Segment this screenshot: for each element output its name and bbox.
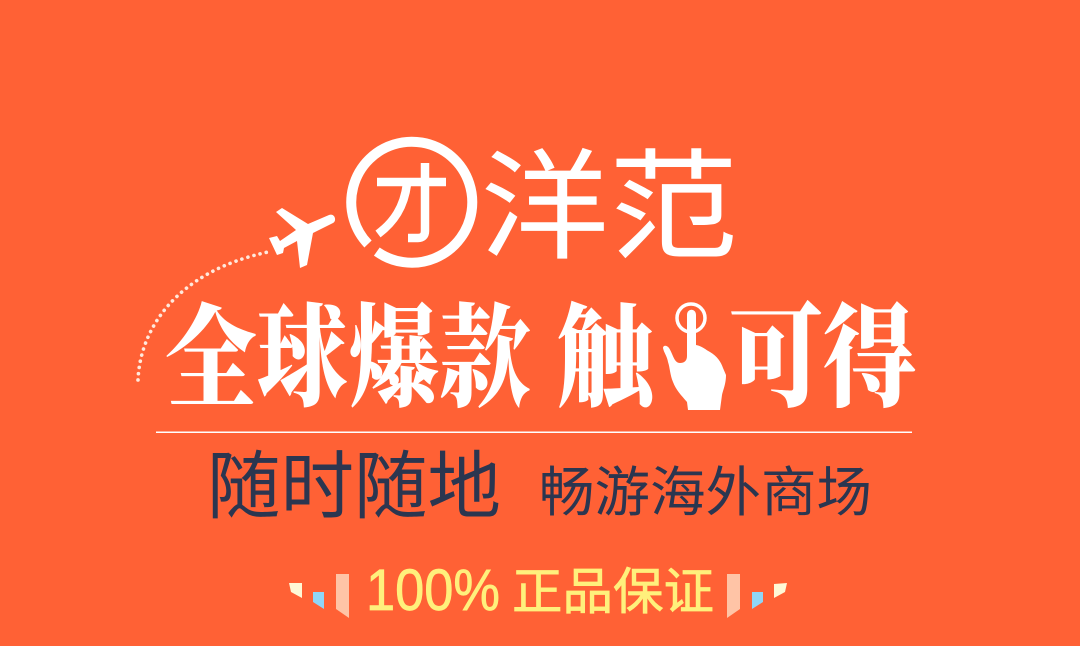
headline right: 可得	[729, 298, 917, 422]
guarantee text: 正品保证	[512, 564, 714, 620]
logo wordmark: 洋范	[480, 141, 738, 275]
icon: tapping hand	[663, 304, 726, 410]
logo mark	[351, 142, 472, 263]
divider	[156, 432, 912, 433]
headline touch character: 触	[556, 298, 664, 422]
logo glyph	[377, 163, 446, 238]
logo ring	[351, 142, 472, 263]
right ribbons	[727, 574, 787, 618]
hand	[663, 310, 726, 410]
icon: airplane	[269, 208, 335, 268]
icon: dotted flight path	[138, 252, 268, 380]
guarantee percent text: 100%	[366, 558, 500, 623]
headline left: 全球爆款	[165, 298, 531, 422]
guarantee badge	[289, 558, 787, 623]
touch ring	[677, 304, 705, 332]
subheading large: 随时随地	[207, 445, 501, 528]
left ribbons	[289, 574, 349, 618]
subheading small: 畅游海外商场	[539, 463, 872, 523]
